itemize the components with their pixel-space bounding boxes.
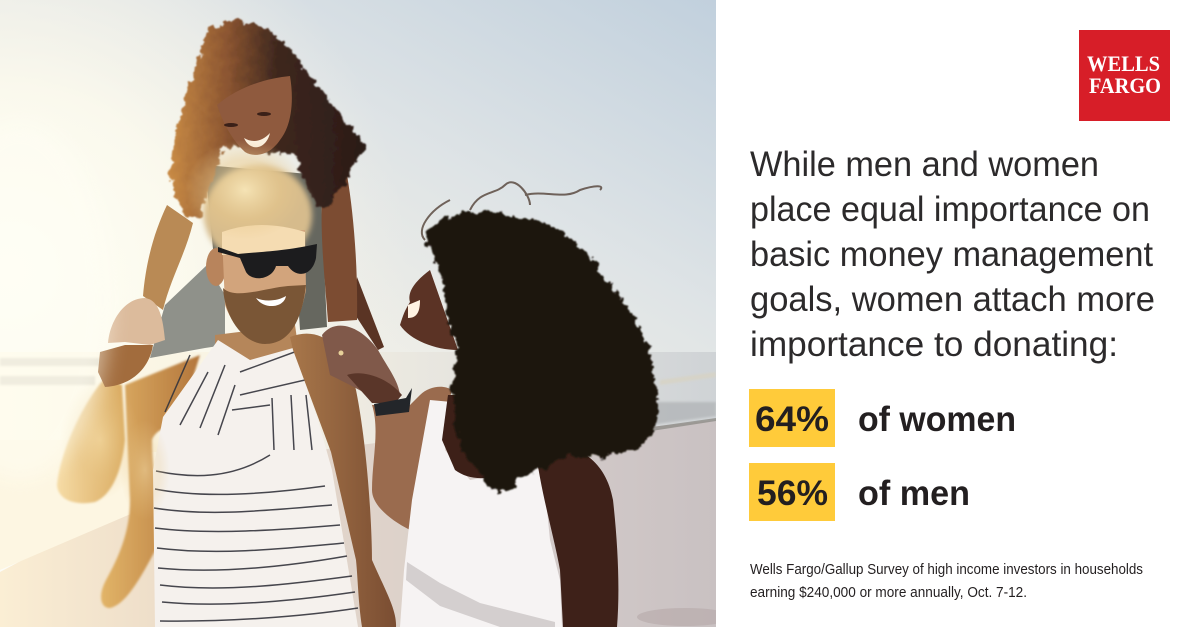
girl's right leg over man's shoulder [290, 334, 396, 627]
stat: 56% of men: 56% [757, 474, 828, 513]
sky background [0, 0, 716, 458]
Wells Fargo logo: FARGO [1089, 73, 1161, 98]
girl's torso [205, 165, 327, 330]
girl's face [217, 76, 292, 155]
woman's curls [422, 182, 601, 240]
girl's shorts [150, 265, 225, 358]
woman's dress [400, 400, 562, 627]
man's neck [215, 325, 296, 360]
man's shirt [153, 340, 358, 627]
wristband [374, 388, 412, 416]
source footnote: Wells Fargo/Gallup Survey of high income investors in households [750, 561, 1143, 578]
headline: importance to donating: [750, 325, 1118, 364]
girl's far leg behind [356, 277, 384, 350]
woman's hair [427, 212, 658, 492]
girl's hair [169, 22, 366, 220]
shirt stripes [154, 350, 358, 621]
sea and wet sand [0, 352, 733, 627]
photo: family on the beach [0, 0, 733, 627]
stat: 64% of women [749, 389, 1016, 447]
girl's right arm [322, 175, 357, 322]
right clasped hands [322, 326, 402, 403]
woman's face [400, 270, 458, 350]
headline [750, 145, 1155, 364]
headline: basic money management [750, 235, 1153, 274]
woman's chest [442, 395, 485, 478]
source footnote: earning $240,000 or more annually, Oct. 7-12. [750, 584, 1027, 601]
headline: goals, women attach more [750, 280, 1155, 319]
stat: 64% of women: 64% [755, 400, 829, 439]
woman's right arm [535, 444, 618, 627]
man's left arm [57, 378, 125, 503]
stat: 56% of men [749, 463, 970, 521]
Wells Fargo logo [1079, 30, 1170, 121]
stat: 64% of women: of women [858, 400, 1016, 439]
source footnote [750, 561, 1143, 601]
headline: place equal importance on [750, 190, 1150, 229]
sunglasses [218, 244, 317, 278]
lace band [406, 562, 555, 627]
left clasped hands [98, 298, 165, 387]
Wells Fargo logo: WELLS [1087, 51, 1160, 76]
bright sun glare [0, 314, 120, 470]
girl's left arm [143, 205, 193, 310]
girl's left leg [101, 355, 200, 608]
man's right arm [372, 387, 452, 530]
man's head [204, 165, 312, 344]
headline: While men and women [750, 145, 1099, 184]
stat: 56% of men: of men [858, 474, 970, 513]
lens flare [60, 140, 305, 520]
